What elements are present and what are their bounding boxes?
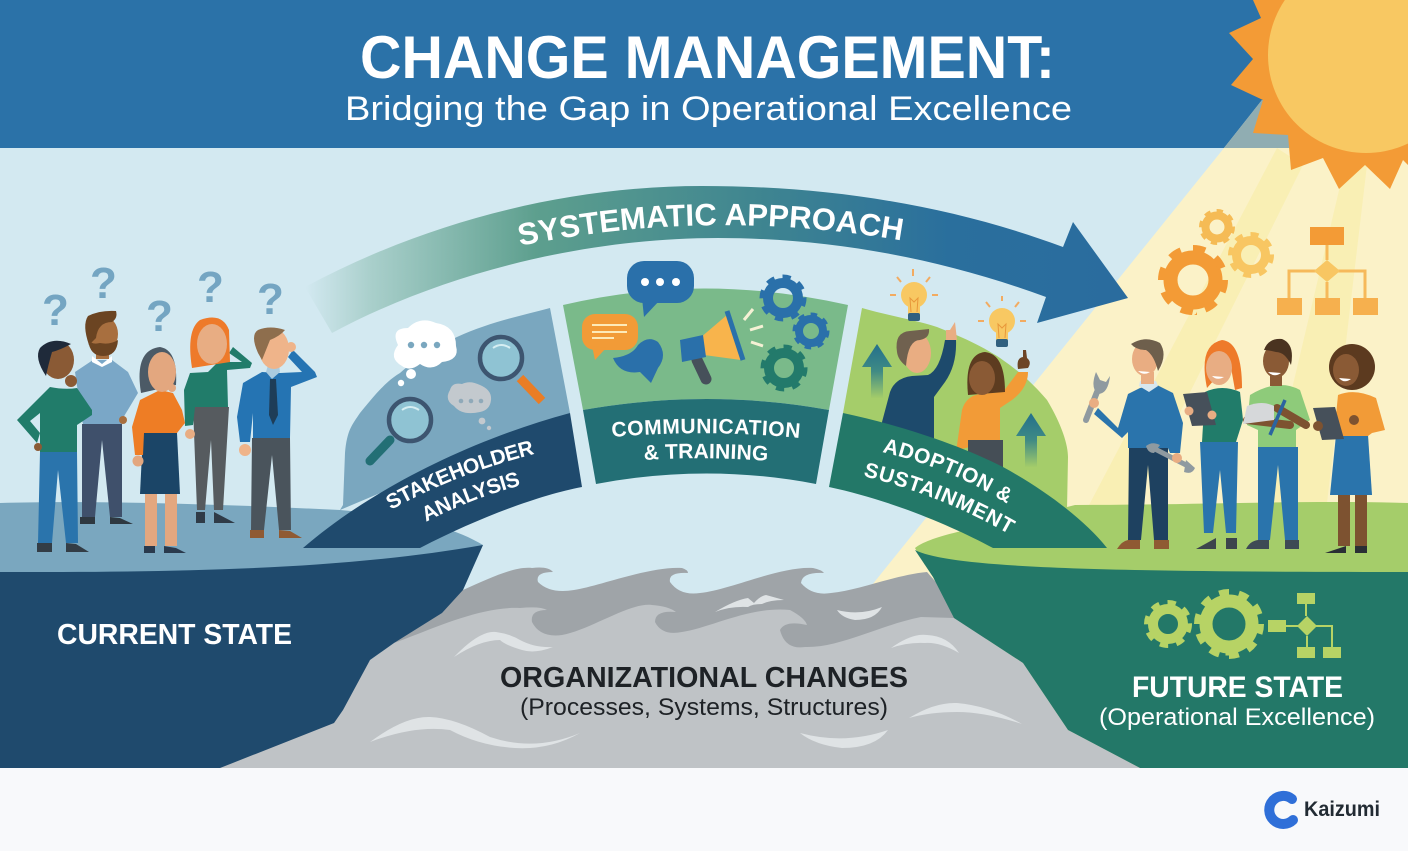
stakeholder label: ANALYSIS bbox=[424, 472, 520, 522]
gear large bbox=[1162, 249, 1224, 311]
sea: organizational changes bbox=[220, 568, 1140, 768]
icon: lower speech bubble bbox=[613, 339, 663, 383]
sea subheading: (Processes, Systems, Structures) bbox=[520, 694, 888, 721]
icon: orange gears and flowchart bbox=[1162, 211, 1378, 315]
foam highlights bbox=[370, 595, 1022, 748]
future state label bbox=[1099, 671, 1375, 731]
icon: gear blue large bbox=[762, 277, 804, 319]
question marks: ? bbox=[146, 292, 173, 341]
flowchart bbox=[1268, 593, 1341, 658]
person 1: green sweater man bbox=[17, 341, 92, 552]
panel: communication and training bbox=[563, 261, 848, 484]
adoption label: SUSTAINMENT bbox=[864, 463, 1016, 532]
stakeholder band bbox=[303, 413, 582, 548]
communication label: COMMUNICATION bbox=[612, 418, 800, 438]
communication label: & TRAINING bbox=[644, 444, 767, 460]
icon: thought cloud bbox=[394, 320, 457, 386]
adoption label: ADOPTION & bbox=[882, 439, 1010, 504]
sky bbox=[0, 148, 1408, 768]
wrench 2 bbox=[1155, 449, 1188, 466]
question marks: ? bbox=[42, 286, 69, 335]
icon: up arrow right bbox=[1016, 413, 1046, 467]
icon: light bulb 2 bbox=[978, 296, 1026, 347]
icon: up arrow left bbox=[862, 344, 892, 398]
icon: gear teal bbox=[763, 347, 805, 389]
question marks: ? bbox=[257, 275, 284, 324]
person: man with roll and tools bbox=[1243, 339, 1310, 549]
current state label: CURRENT STATE bbox=[57, 619, 292, 651]
person: woman with tablet bbox=[1313, 344, 1385, 553]
gear small bbox=[1201, 211, 1233, 243]
left cliff: current state bbox=[0, 502, 483, 768]
question marks: ? bbox=[197, 263, 224, 312]
systematic approach arrow bbox=[318, 186, 1128, 333]
person: man with wrenches bbox=[1086, 339, 1195, 549]
title bbox=[345, 24, 1072, 128]
panel: adoption and sustainment bbox=[829, 269, 1107, 548]
title line 2: Bridging the Gap in Operational Excellence bbox=[345, 90, 1072, 128]
sun bbox=[1229, 0, 1408, 189]
person 5: man with tie bbox=[237, 328, 317, 538]
person 4: red-haired woman bbox=[184, 318, 252, 523]
header band bbox=[0, 0, 1408, 148]
communication label bbox=[612, 418, 800, 460]
brand logo bbox=[1269, 796, 1380, 824]
icon: megaphone bbox=[680, 309, 763, 379]
title line 1: CHANGE MANAGEMENT: bbox=[360, 24, 1055, 91]
stakeholder label: STAKEHOLDER bbox=[386, 441, 534, 508]
future state subheading: (Operational Excellence) bbox=[1099, 704, 1375, 731]
right cliff: future state bbox=[915, 502, 1408, 768]
people: future state group bbox=[1086, 339, 1385, 553]
adoption band bbox=[829, 413, 1107, 548]
sunlight rays bbox=[868, 100, 1408, 768]
icon: blue speech bubble bbox=[627, 261, 694, 317]
figure: woman pointing bbox=[957, 350, 1030, 470]
person 2: bearded man bbox=[75, 311, 138, 524]
icon: orange speech bubble bbox=[582, 314, 638, 360]
gear small bbox=[1146, 602, 1190, 646]
wrench 1 bbox=[1086, 392, 1097, 420]
icon: grey cloud bbox=[448, 382, 491, 430]
future state heading: FUTURE STATE bbox=[1132, 671, 1343, 704]
icon: gear blue small bbox=[794, 314, 828, 348]
icon: light bulb 1 bbox=[890, 269, 938, 321]
sea label bbox=[500, 662, 908, 721]
sea heading: ORGANIZATIONAL CHANGES bbox=[500, 662, 908, 694]
icon: magnifier orange bbox=[480, 337, 542, 401]
logo wordmark: Kaizumi bbox=[1304, 798, 1380, 821]
logo mark bbox=[1269, 796, 1293, 824]
gear large bbox=[1198, 592, 1260, 656]
icon: magnifier teal bbox=[370, 399, 431, 461]
people: current state group bbox=[17, 259, 317, 553]
panel: stakeholder analysis bbox=[303, 308, 582, 548]
question marks: ? bbox=[90, 259, 117, 308]
question marks bbox=[42, 259, 284, 341]
arrow label: SYSTEMATIC APPROACH bbox=[518, 204, 903, 244]
icon: green gears and flowchart bbox=[1146, 592, 1341, 658]
flowchart bbox=[1277, 227, 1378, 315]
person: red-haired woman with tablet bbox=[1183, 340, 1243, 549]
person 3: orange top woman bbox=[132, 347, 186, 553]
gear medium bbox=[1230, 234, 1272, 276]
figure: man pointing bbox=[882, 322, 957, 440]
